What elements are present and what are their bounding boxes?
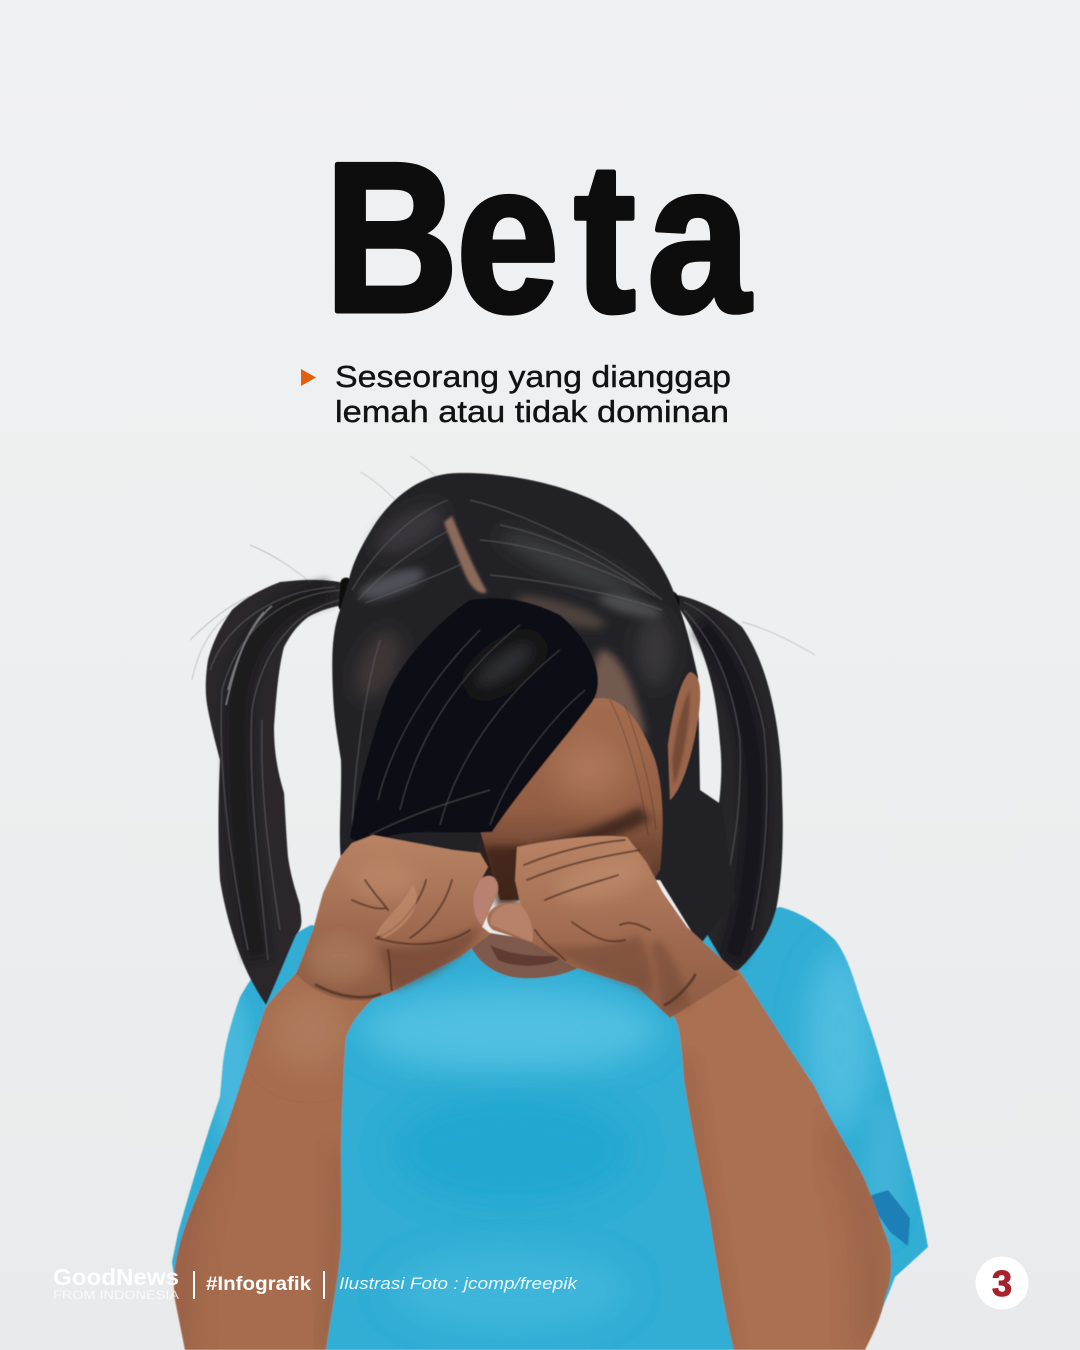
left arm (174, 973, 372, 1350)
right arm (673, 969, 892, 1350)
ear (668, 672, 700, 800)
page number badge: 3 (992, 1263, 1012, 1304)
hair strands (352, 500, 662, 830)
photo: crying girl (172, 456, 928, 1350)
title: Beta (325, 119, 752, 357)
scalp and shine patches (357, 563, 427, 605)
sleeve hem (866, 1190, 910, 1246)
definition text: Seseorang yang dianggap (335, 359, 731, 394)
chin and mouth (470, 930, 600, 978)
flyaway strands (742, 622, 815, 655)
face and forehead (480, 698, 663, 910)
page number badge (976, 1256, 1028, 1310)
fringe lower strand (370, 790, 490, 835)
left fist (296, 835, 498, 1000)
footer credits (53, 1264, 579, 1302)
hashtag: #Infografik (206, 1274, 311, 1295)
logo: GoodNews (53, 1264, 179, 1302)
right ponytail (657, 587, 815, 975)
flyaway strands (190, 545, 310, 680)
orange triangle bullet (301, 369, 316, 386)
fringe (350, 598, 598, 846)
blue shirt (172, 907, 928, 1350)
logo: GoodNews: GoodNews (53, 1264, 179, 1290)
right fist shadows (540, 935, 652, 995)
logo: GoodNews: FROM INDONESIA (53, 1288, 179, 1302)
photo credit: Ilustrasi Foto : jcomp/freepik (339, 1274, 579, 1293)
infographic canvas (54, 162, 1028, 1350)
right fist (487, 836, 739, 1018)
eye crease shadow (515, 806, 650, 866)
left fist shadows (378, 925, 480, 990)
head of hair (332, 456, 735, 945)
fly-away strands on top (360, 456, 440, 500)
shadow between the fists (482, 846, 522, 910)
strands over forehead (610, 700, 656, 835)
definition text: lemah atau tidak dominan (335, 394, 729, 429)
left ponytail (190, 545, 346, 1005)
definition text (335, 359, 731, 429)
